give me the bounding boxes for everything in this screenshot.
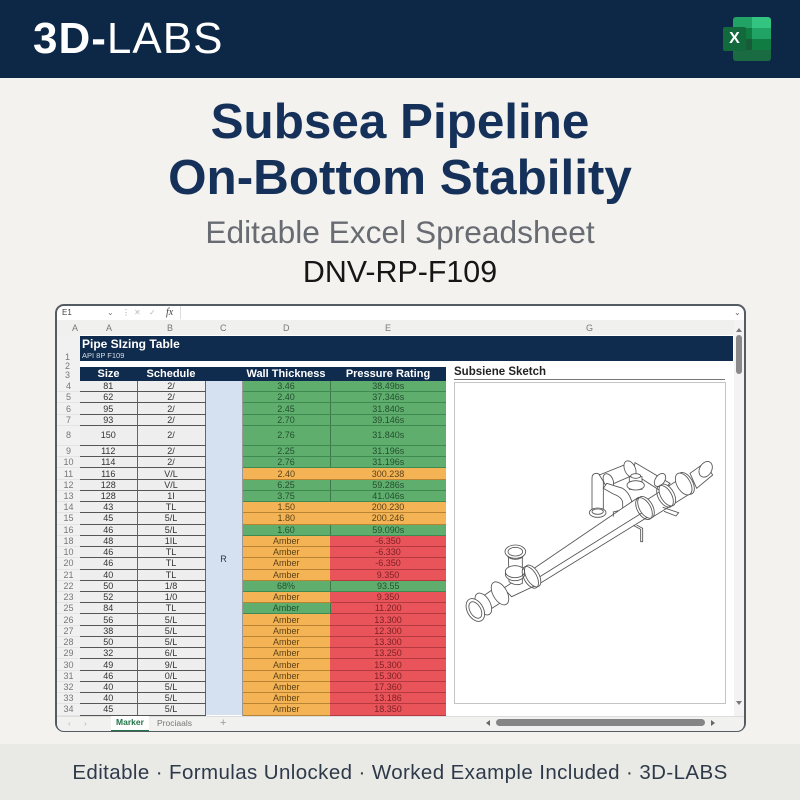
pipe sizing table: 2.45 <box>277 404 295 414</box>
pipe sizing table: 38.49bs <box>372 381 404 391</box>
formula bar: ⌄ <box>734 308 741 317</box>
pipe sizing table: 5/L <box>165 704 177 714</box>
pipe sizing table: TL <box>166 547 176 557</box>
pipe sizing table: 2.76 <box>277 457 295 467</box>
pipe sizing table: 5/L <box>165 513 177 523</box>
pipe sizing table: -6.350 <box>375 536 401 546</box>
pipe sizing table: V/L <box>164 469 178 479</box>
pipe sizing table: 31.196s <box>372 457 404 467</box>
icon: Excel <box>723 17 771 61</box>
pipe sizing table: 59.286s <box>372 480 404 490</box>
pipe sizing table: 16 <box>63 525 74 535</box>
pipe sizing table: 31.196s <box>372 446 404 456</box>
pipe sizing table: Amber <box>273 592 300 602</box>
title: Subsea Pipeline <box>211 94 589 149</box>
pipe sizing table: 45 <box>103 704 113 714</box>
pipe sizing table: 56 <box>103 615 113 625</box>
row numbers 1 to 3: 1 <box>65 352 70 362</box>
formula bar: ⋮ <box>122 308 130 317</box>
pipe sizing table: 25 <box>63 603 74 613</box>
pipe sizing table: 2.40 <box>277 469 295 479</box>
pipe sizing table: 17.360 <box>374 682 402 692</box>
pipe sizing table: Amber <box>273 660 300 670</box>
pipe sizing table: 11 <box>64 469 73 479</box>
row numbers 1 to 3 <box>57 335 80 381</box>
pipe sizing table: Amber <box>273 693 300 703</box>
pipe sizing table: Amber <box>273 547 300 557</box>
column headers: C <box>220 323 226 333</box>
pipe sizing table: 62 <box>103 392 113 402</box>
pipe sizing table: 3.75 <box>277 491 295 501</box>
pipe sizing table: 5/L <box>165 637 177 647</box>
pipe sizing table: 1.60 <box>277 525 295 535</box>
pipe sizing table: 2/ <box>167 446 175 456</box>
pipe sizing table: 4 <box>66 381 71 391</box>
pipe sizing table: 300.238 <box>372 469 404 479</box>
pipe sizing table: -6.350 <box>375 558 401 568</box>
pipe sizing table: 9 <box>66 446 71 456</box>
header band <box>0 0 800 78</box>
pipe sizing table: 14 <box>63 502 74 512</box>
title <box>168 94 632 205</box>
pipe sizing table: 9.350 <box>377 592 399 602</box>
pipe sizing table: 59.090s <box>372 525 404 535</box>
pipe sizing table: Amber <box>273 704 300 714</box>
standard reference: DNV-RP-F109 <box>303 255 497 289</box>
pipe sizing table: 3.46 <box>277 381 295 391</box>
pipe sizing table: Amber <box>273 626 300 636</box>
sheet tabs bar: Marker <box>116 717 144 727</box>
pipe sizing table: 2.70 <box>277 415 295 425</box>
pipe sizing table: Amber <box>273 603 299 613</box>
pipe sizing table: 52 <box>103 592 113 602</box>
pipe sizing table: 8 <box>66 430 71 440</box>
pipe sizing table: 29 <box>63 648 74 658</box>
pipe sizing table: 1.80 <box>277 513 295 523</box>
icon: Excel: X <box>729 30 740 47</box>
column headers: G <box>586 323 593 333</box>
sketch heading <box>454 365 725 380</box>
pipe sizing table: 112 <box>101 446 115 456</box>
pipe sizing table: 93 <box>103 415 113 425</box>
pipe sizing table: 2.76 <box>277 430 295 440</box>
formula bar: fx <box>166 307 173 318</box>
pipe sizing table: 2.25 <box>277 446 295 456</box>
pipe sizing table: 48 <box>103 536 113 546</box>
pipe sizing table: 39.146s <box>372 415 404 425</box>
pipe sizing table: 38 <box>103 626 113 636</box>
sheet tabs bar <box>57 716 744 731</box>
pipe sizing table: 33 <box>63 693 74 703</box>
pipe sizing table: Amber <box>273 615 300 625</box>
pipe sizing table: 41.046s <box>372 491 404 501</box>
formula bar: ⌄ <box>107 308 114 317</box>
pipe sizing table: 6 <box>66 404 71 414</box>
pipe sizing table: 13 <box>63 491 74 501</box>
pipe sizing table: 12.300 <box>374 626 402 636</box>
pipe sizing table: 84 <box>103 603 113 613</box>
pipe sizing table: 11.200 <box>375 603 402 613</box>
pipe sizing table: TL <box>166 502 176 512</box>
pipe sizing table: 2/ <box>167 457 175 467</box>
sheet tabs bar: + <box>220 717 226 729</box>
pipe sizing table: 2/ <box>167 430 175 440</box>
pipe sizing table: 200.246 <box>372 513 404 523</box>
sheet title band: API 8P F109 <box>82 350 124 360</box>
pipe sizing table: Amber <box>273 682 300 692</box>
sheet title band: Pipe SIzing Table <box>82 336 180 350</box>
main pipeline <box>480 459 715 612</box>
pipe sizing table: 95 <box>103 404 113 414</box>
pipe sizing table: Amber <box>273 570 300 580</box>
pipe sizing table: 1I <box>167 491 175 501</box>
sheet title band <box>80 336 733 361</box>
pipe sizing table: 23 <box>63 592 74 602</box>
sketch panel frame <box>454 382 726 704</box>
column headers: D <box>283 323 290 333</box>
pipe sizing table: -6.330 <box>375 547 401 557</box>
pipe sizing table: 37.346s <box>372 392 404 402</box>
pipe sizing table: 2/ <box>167 415 175 425</box>
pipe sizing table: 26 <box>63 615 74 625</box>
pipe sizing table: 45 <box>103 513 113 523</box>
pipe sizing table: 128 <box>101 480 116 490</box>
pipe sizing table: 15 <box>63 513 74 523</box>
pipe sizing table: TL <box>166 558 176 568</box>
pipe sizing table: 68% <box>277 581 295 591</box>
column headers: B <box>167 323 173 333</box>
logo: 3D-LABS: 3D-LABS <box>33 14 223 63</box>
pipe sizing table: 5/L <box>165 626 177 636</box>
sheet tabs bar: ‹ <box>68 718 71 728</box>
table header row: Size <box>97 368 120 380</box>
pipeline isometric sketch <box>466 460 714 622</box>
pipe sizing table: 40 <box>103 693 113 703</box>
pipe sizing table: 13.186 <box>374 693 402 703</box>
pipe sizing table: 7 <box>66 415 71 425</box>
sheet tabs bar: Prociaals <box>157 718 192 728</box>
formula bar: ✕ <box>134 308 141 317</box>
pipe sizing table: 22 <box>63 581 74 591</box>
pipe sizing table: 2/ <box>167 381 175 391</box>
pipe sizing table: 128 <box>101 491 116 501</box>
row numbers 1 to 3: 2 <box>65 361 70 371</box>
footer text: Editable · Formulas Unlocked · Worked Example Included · 3D-LABS <box>72 761 728 784</box>
pipe sizing table: 40 <box>103 570 113 580</box>
pipe sizing table: 34 <box>63 704 74 714</box>
formula bar <box>62 306 741 319</box>
vertical scrollbar <box>734 320 744 716</box>
pipe sizing table: 200.230 <box>372 502 404 512</box>
pipe sizing table: 31.840s <box>372 430 404 440</box>
pipe sizing table: 49 <box>103 660 113 670</box>
pipe sizing table: 13.300 <box>374 637 402 647</box>
pipe sizing table: TL <box>166 570 176 580</box>
row numbers 1 to 3: 3 <box>65 370 70 380</box>
panel: spreadsheet window <box>55 304 746 732</box>
pipe sizing table: 116 <box>101 469 115 479</box>
pipe sizing table: 6.25 <box>277 480 295 490</box>
pipe sizing table: 9/L <box>165 660 177 670</box>
pipe sizing table: 46 <box>103 671 113 681</box>
sheet tabs bar: › <box>84 718 87 728</box>
pipe sizing table: 10 <box>63 547 74 557</box>
pipe sizing table: 1/0 <box>165 592 177 602</box>
pipe sizing table: 20 <box>63 558 74 568</box>
pipe sizing table: 50 <box>103 581 113 591</box>
pipe sizing table: 5/L <box>165 615 177 625</box>
pipe sizing table: 28 <box>63 637 74 647</box>
table header row: Pressure Rating <box>346 368 430 380</box>
pipe sizing table: Amber <box>273 637 300 647</box>
column headers: A <box>72 323 78 333</box>
pipe sizing table: 46 <box>103 525 113 535</box>
pipe sizing table: 40 <box>103 682 113 692</box>
pipe sizing table: 18 <box>63 536 74 546</box>
subtitle: Editable Excel Spreadsheet <box>205 214 595 250</box>
pipe sizing table: R <box>220 554 227 564</box>
pipe sizing table: 18.350 <box>374 704 402 714</box>
pipe sizing table: 5 <box>66 392 71 402</box>
table header row: Wall Thickness <box>246 368 326 380</box>
pipe sizing table: 81 <box>103 381 113 391</box>
pipe sizing table: 31 <box>63 671 74 681</box>
pipe sizing table: 13.250 <box>374 648 402 658</box>
pipe sizing table: 5/L <box>165 525 177 535</box>
formula bar: E1 <box>62 308 72 317</box>
pipe sizing table: 2/ <box>167 404 175 414</box>
column headers: E <box>385 323 391 333</box>
pipe sizing table: TL <box>166 603 176 613</box>
column headers <box>57 320 734 335</box>
pipe sizing table: Amber <box>273 671 300 681</box>
pipe sizing table: 27 <box>63 626 74 636</box>
pipe sizing table: 15.300 <box>374 671 402 681</box>
pipe sizing table: 21 <box>63 570 74 580</box>
pipe end flanges <box>462 579 512 625</box>
pipe sizing table: 5/L <box>165 693 177 703</box>
pipe sizing table: 150 <box>101 430 116 440</box>
pipe sizing table: 5/L <box>165 682 177 692</box>
table header row: Schedule <box>147 368 195 380</box>
footer band <box>0 744 800 800</box>
pipe sizing table: 32 <box>103 648 113 658</box>
column headers: A <box>106 323 112 333</box>
pipe sizing table: 10 <box>63 457 74 467</box>
pipe sizing table <box>57 381 446 716</box>
pipe sizing table: 2.40 <box>277 392 295 402</box>
pipe sizing table: 12 <box>63 480 74 490</box>
pipe sizing table: 2/ <box>167 392 175 402</box>
vertical leg <box>589 473 606 517</box>
pipe sizing table: 1/8 <box>165 581 177 591</box>
pipe sizing table: 0/L <box>165 671 177 681</box>
pipe sizing table: Amber <box>273 536 300 546</box>
pipe sizing table: 1.50 <box>277 502 295 512</box>
pipe sizing table: 43 <box>103 502 113 512</box>
rear loop pipes <box>599 459 670 516</box>
table header row <box>80 367 446 381</box>
pipe sizing table: 30 <box>63 660 74 670</box>
sketch heading: Subsiene Sketch <box>454 366 546 378</box>
pipe sizing table: 31.840s <box>372 404 404 414</box>
pipe sizing table: 13.300 <box>374 615 402 625</box>
T branch riser <box>505 545 544 591</box>
pipe sizing table: 32 <box>63 682 74 692</box>
pipe sizing table: Amber <box>273 558 300 568</box>
pipe sizing table: 1IL <box>165 536 177 546</box>
pipe sizing table: 93.55 <box>377 581 400 591</box>
pipe sizing table: 46 <box>103 547 113 557</box>
pipe sizing table: 46 <box>103 558 113 568</box>
pipe sizing table: 114 <box>101 457 115 467</box>
pipe sizing table: Amber <box>273 648 300 658</box>
pipe sizing table: V/L <box>164 480 178 490</box>
formula bar: ✓ <box>149 308 156 317</box>
title: On-Bottom Stability <box>168 150 632 205</box>
pipe sizing table: 50 <box>103 637 113 647</box>
pipe sizing table: 9.350 <box>377 570 399 580</box>
pipe sizing table: 15.300 <box>374 660 402 670</box>
pipe sizing table: 6/L <box>165 648 177 658</box>
